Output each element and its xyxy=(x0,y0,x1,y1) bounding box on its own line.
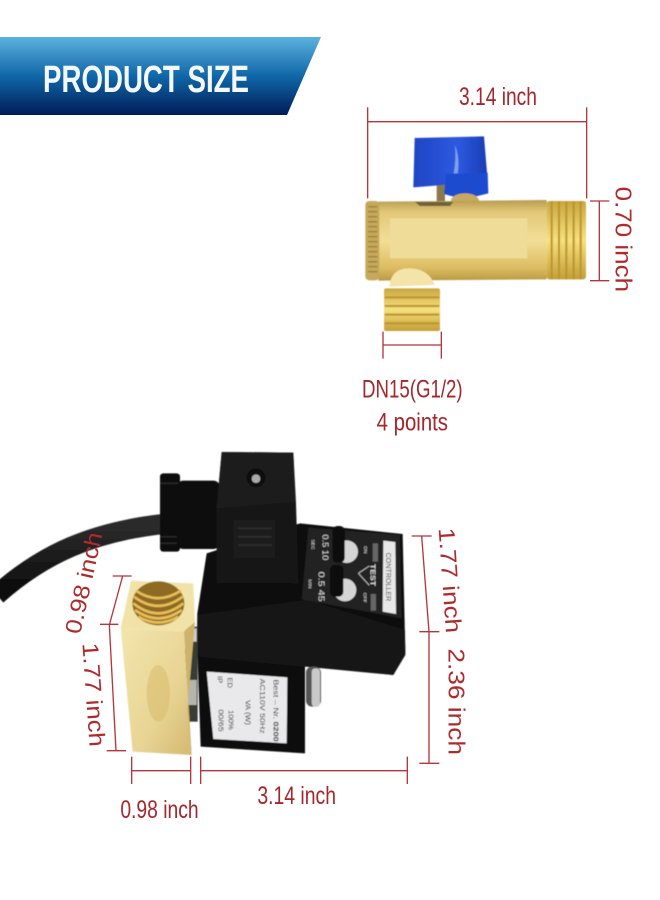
product photo: brass ball valve xyxy=(365,136,586,331)
cable gland xyxy=(160,473,220,552)
controller face panel: CONTROLLER xyxy=(384,553,391,601)
dimension: block width xyxy=(120,757,199,824)
icon: blue valve handle xyxy=(413,136,488,208)
spec label: Best – Nr. 0200 xyxy=(271,679,280,742)
controller face panel: OFF xyxy=(361,593,367,603)
controller face panel: SEC xyxy=(310,539,316,550)
spec label: 00/65 xyxy=(216,709,225,732)
dimensions: drain timer xyxy=(59,527,469,824)
spec label xyxy=(207,672,287,743)
valve body xyxy=(378,200,547,281)
spec label: IP xyxy=(215,676,224,683)
spec label: AC110V 50Hz xyxy=(258,679,267,734)
controller face panel: MIN xyxy=(306,579,312,589)
product photo: electronic drain timer xyxy=(0,452,405,755)
dimension: outlet thread: 4 points xyxy=(377,410,448,437)
banner: product size xyxy=(0,37,321,115)
controller face panel xyxy=(302,526,402,618)
dimension: total height xyxy=(419,632,469,763)
controller housing xyxy=(197,523,405,675)
controller face panel: ON xyxy=(362,546,368,554)
dimension: valve diameter xyxy=(590,187,636,292)
metal plug xyxy=(306,667,321,707)
dimension: valve diameter: 0.70 inch xyxy=(610,187,636,292)
dimension: block height xyxy=(77,625,126,751)
dimension: block width: 0.98 inch xyxy=(120,797,199,824)
dimension: block depth: 0.98 inch xyxy=(59,530,107,636)
spec label: ED xyxy=(225,677,234,688)
dimension: block height: 1.77 inch xyxy=(77,642,111,747)
dimension: total height: 2.36 inch xyxy=(443,648,469,755)
dimension: body width xyxy=(201,757,407,810)
dimension: outlet thread: DN15(G1/2) xyxy=(362,376,463,403)
dimension: valve length xyxy=(368,84,587,198)
dimension: valve length: 3.14 inch xyxy=(459,84,537,111)
controller face panel: 0.5 10 xyxy=(321,534,331,561)
dimension: block depth xyxy=(59,530,132,636)
dimensions: valve xyxy=(362,84,636,437)
banner title: PRODUCT SIZE xyxy=(43,59,249,101)
hex nut xyxy=(185,627,198,722)
dimension: body width: 3.14 inch xyxy=(257,783,336,810)
controller face panel: 0.5 45 xyxy=(316,572,326,602)
spec label: VA (W) xyxy=(244,700,253,725)
brass block xyxy=(121,581,195,755)
controller face panel: TEST xyxy=(369,564,378,587)
right thread xyxy=(547,201,586,279)
lower thread outlet xyxy=(384,268,440,331)
power cable xyxy=(0,524,163,595)
dimension: controller height xyxy=(412,527,467,634)
spec label: 100% xyxy=(226,710,235,730)
solenoid coil xyxy=(197,650,305,753)
dimension: controller height: 1.77 inch xyxy=(434,527,467,634)
dimension: outlet thread xyxy=(362,332,463,437)
connector box xyxy=(213,452,298,597)
knurled end cap xyxy=(365,201,379,280)
